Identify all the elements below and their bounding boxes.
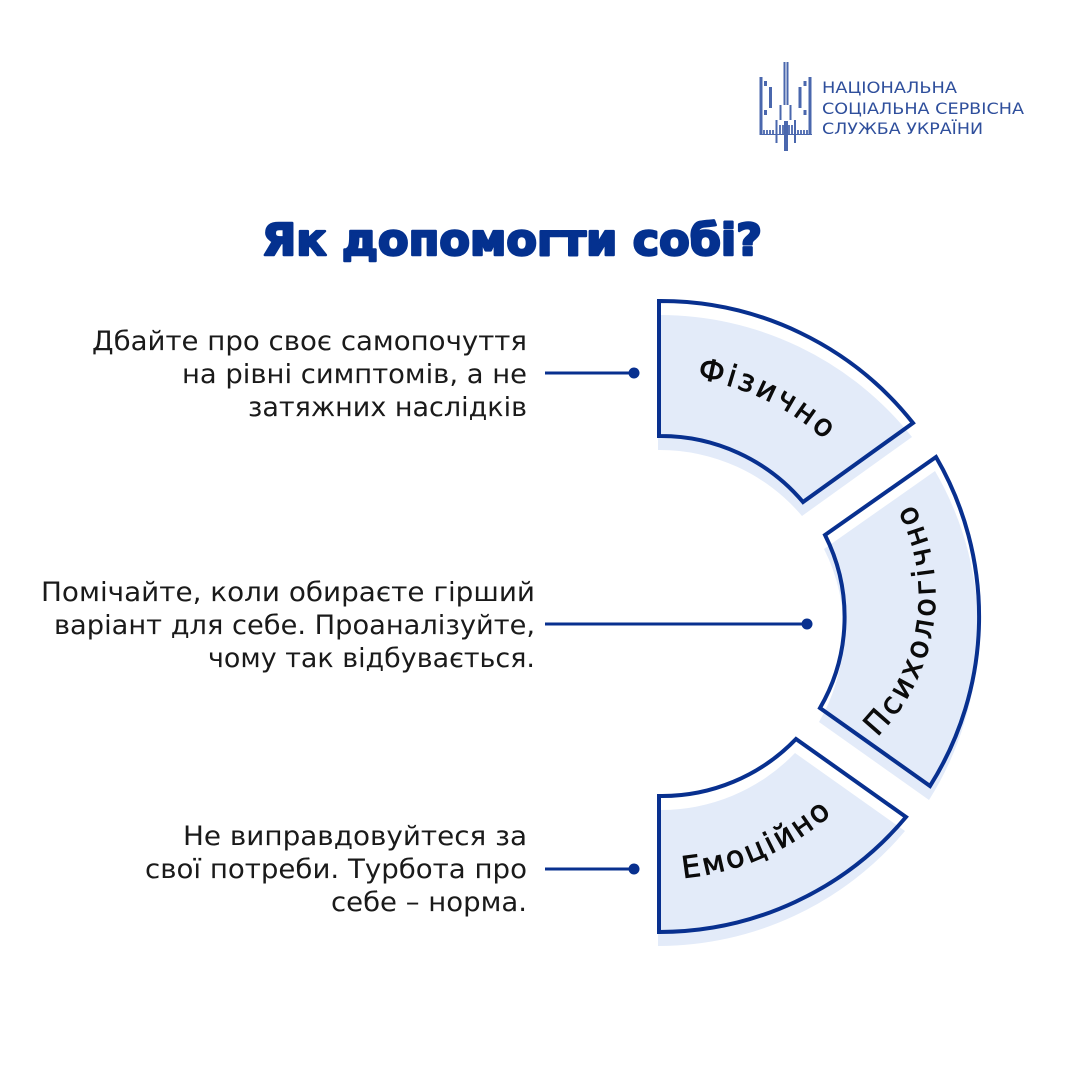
label: emotional: Емоційно — [682, 804, 828, 878]
title: Як допомогти собі? — [262, 215, 762, 266]
text block: emotional advice: себе – норма. — [331, 887, 527, 918]
text block: physical advice: на рівні симптомів, а не — [182, 359, 527, 390]
label: physical: Фізично — [700, 358, 832, 436]
text block: physical advice — [92, 326, 527, 423]
logo emblem — [760, 62, 812, 151]
segment: emotional — [657, 736, 909, 946]
text block: emotional advice: Не виправдовуйтеся за — [183, 821, 527, 852]
text block: emotional advice — [145, 821, 527, 918]
label: psychological: Психологічно — [862, 508, 936, 736]
connector: psychological — [545, 618, 812, 630]
connector: emotional — [545, 864, 640, 874]
text block: physical advice: затяжних наслідків — [248, 392, 527, 423]
segment: physical — [657, 299, 916, 516]
connector: physical — [545, 368, 640, 378]
text block: psychological advice: варіант для себе. Проаналізуйте, — [54, 610, 535, 641]
text block: psychological advice: чому так відбувається. — [208, 643, 535, 674]
text block: psychological advice: Помічайте, коли обираєте гірший — [41, 577, 535, 608]
text block: psychological advice — [41, 577, 535, 674]
logo text — [822, 78, 1024, 138]
logo text: НАЦІОНАЛЬНА — [822, 78, 957, 97]
segment: psychological — [817, 454, 982, 800]
text block: emotional advice: свої потреби. Турбота про — [145, 854, 527, 885]
logo text: СЛУЖБА УКРАЇНИ — [822, 119, 983, 138]
text block: physical advice: Дбайте про своє самопочуття — [92, 326, 527, 357]
logo text: СОЦІАЛЬНА СЕРВІСНА — [822, 99, 1024, 118]
logo — [760, 62, 1024, 151]
